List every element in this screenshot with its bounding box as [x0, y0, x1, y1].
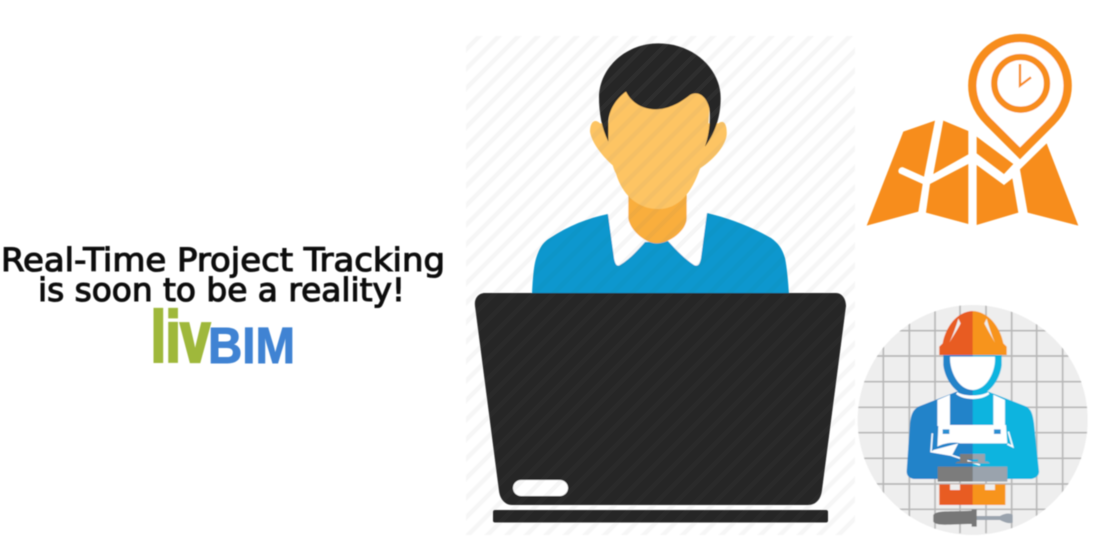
map panels — [867, 121, 1078, 226]
sweater — [532, 213, 789, 294]
head — [590, 43, 727, 243]
collar — [956, 392, 989, 399]
icon: map with clock pin — [867, 38, 1078, 226]
icon: construction worker badge — [850, 300, 1090, 535]
illustration: person at laptop — [466, 36, 855, 535]
head outline — [943, 355, 973, 397]
heading: real-time project tracking: is soon to be a reality! — [38, 271, 405, 309]
person — [532, 43, 789, 294]
face — [950, 357, 995, 390]
blueprint grid — [850, 300, 1090, 533]
ears — [590, 121, 727, 168]
location pin — [972, 38, 1068, 153]
laptop — [475, 293, 846, 522]
diagonal stripe overlay — [466, 36, 855, 535]
folded arm outlines — [931, 443, 958, 456]
overall straps — [937, 395, 1005, 426]
neck — [628, 193, 687, 243]
collar — [608, 195, 707, 266]
screwdriver — [933, 509, 1013, 527]
hair — [599, 43, 721, 147]
overall bib — [937, 425, 1007, 447]
laptop base — [493, 510, 828, 522]
heading: real-time project tracking: Real-Time Project Tracking — [1, 241, 445, 279]
hard hat — [939, 311, 1007, 355]
badge circle — [858, 305, 1088, 535]
clock — [994, 57, 1047, 110]
face — [608, 83, 709, 209]
logo: livBIM: BIM — [208, 317, 295, 374]
laptop badge — [513, 480, 568, 496]
worker body — [907, 355, 1039, 479]
logo: livBIM: liv — [151, 298, 210, 378]
logo: livBIM — [151, 298, 295, 378]
toolbox — [938, 454, 1007, 505]
heading: real-time project tracking — [1, 241, 445, 309]
laptop body — [475, 293, 846, 505]
